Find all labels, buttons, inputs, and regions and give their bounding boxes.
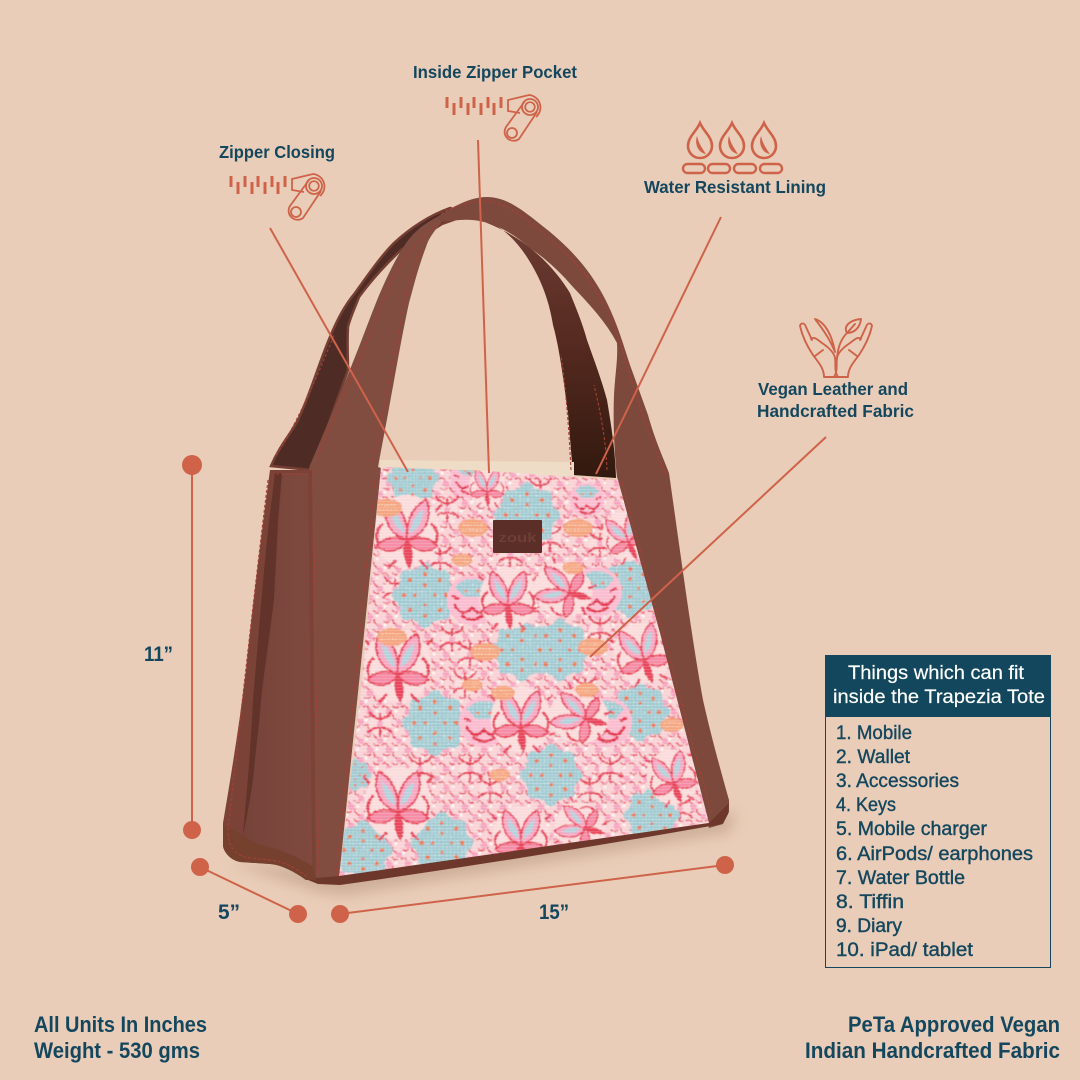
footer note: vegan and handcrafted: PeTa Approved Vegan bbox=[848, 1012, 1060, 1037]
list of items: 1. Mobile bbox=[836, 722, 912, 744]
light strip behind fabric opening bbox=[380, 460, 574, 478]
list of items: 3. Accessories bbox=[836, 770, 959, 792]
pink and red leaf motifs bbox=[363, 467, 705, 869]
icon: hands holding plant bbox=[800, 319, 872, 377]
dimension: depth 5 inches bbox=[191, 858, 307, 924]
list of items bbox=[836, 722, 1033, 961]
front handle, left side bbox=[308, 217, 442, 880]
panel header: inside the Trapezia Tote bbox=[833, 687, 1045, 708]
floral fabric panel bbox=[339, 467, 709, 876]
rear handle, right side bbox=[484, 219, 616, 478]
list of items: 2. Wallet bbox=[836, 746, 911, 768]
list of items: 7. Water Bottle bbox=[836, 867, 965, 889]
footer note: vegan and handcrafted: Indian Handcrafted Fabric bbox=[805, 1038, 1060, 1063]
heading: zipper closing: Zipper Closing bbox=[219, 142, 335, 162]
blue and red flowers bbox=[447, 458, 632, 747]
leader: water resistant lining bbox=[596, 217, 721, 474]
bottom rim of the bag bbox=[308, 803, 729, 885]
tote bag illustration bbox=[223, 197, 735, 895]
rear handle, left side bbox=[271, 208, 470, 470]
gusset base rim bbox=[223, 826, 316, 880]
seam stitching bbox=[228, 201, 712, 876]
footer note: units and weight: All Units In Inches bbox=[34, 1012, 207, 1037]
dimension: width 15 inches: 15” bbox=[539, 901, 569, 924]
bag ground shadow bbox=[228, 812, 735, 895]
front handle and right body bbox=[437, 197, 729, 828]
blue medallions bbox=[333, 452, 680, 880]
heading: water resistant lining: Water Resistant Lining bbox=[644, 177, 826, 197]
gusset inner shadow fold bbox=[243, 473, 282, 833]
list of items: 5. Mobile charger bbox=[836, 818, 987, 840]
panel header: Things which can fit bbox=[848, 663, 1025, 684]
leader lines bbox=[270, 140, 826, 657]
list of items: 10. iPad/ tablet bbox=[836, 939, 974, 961]
list of items: 4. Keys bbox=[836, 794, 896, 816]
dimension: depth 5 inches: 5” bbox=[218, 901, 240, 924]
panel header bbox=[825, 655, 1051, 717]
callout: water resistant lining bbox=[644, 123, 826, 197]
callout: inside zipper pocket bbox=[413, 62, 577, 141]
dimension: height 11 inches: 11” bbox=[144, 643, 173, 666]
gusset inner panel bbox=[243, 473, 312, 866]
panel: things which can fit bbox=[825, 655, 1051, 968]
orange blooms bbox=[372, 499, 684, 781]
icon: zipper pull bbox=[447, 95, 540, 141]
leader: vegan leather and fabric bbox=[590, 437, 826, 657]
list of items: 9. Diary bbox=[836, 915, 902, 937]
side gusset bbox=[223, 470, 316, 880]
callout: zipper closing bbox=[219, 142, 335, 220]
leader: zipper closing bbox=[270, 228, 408, 472]
footer note: vegan and handcrafted bbox=[805, 1012, 1060, 1063]
list of items: 8. Tiffin bbox=[836, 891, 904, 913]
callout: vegan leather and handcrafted fabric bbox=[757, 319, 914, 421]
heading: vegan leather and handcrafted fabric: Vegan Leather and bbox=[758, 379, 908, 399]
small red sprigs bbox=[368, 478, 692, 822]
footer note: units and weight: Weight - 530 gms bbox=[34, 1038, 200, 1063]
footer note: units and weight bbox=[34, 1012, 207, 1063]
heading: inside zipper pocket: Inside Zipper Pocket bbox=[413, 62, 577, 82]
panel frame bbox=[826, 656, 1050, 968]
dimension: width 15 inches bbox=[331, 856, 734, 924]
dimension: height 11 inches bbox=[144, 455, 202, 839]
list of items: 6. AirPods/ earphones bbox=[836, 843, 1033, 865]
brand patch bbox=[493, 520, 542, 553]
heading: vegan leather and handcrafted fabric: Handcrafted Fabric bbox=[757, 401, 914, 421]
heading: vegan leather and handcrafted fabric bbox=[757, 379, 914, 421]
icon: water drops on fabric bbox=[683, 123, 782, 173]
icon: zipper pull bbox=[231, 174, 324, 220]
brand patch: zouk bbox=[498, 530, 537, 545]
leader: inside zipper pocket bbox=[478, 140, 489, 473]
